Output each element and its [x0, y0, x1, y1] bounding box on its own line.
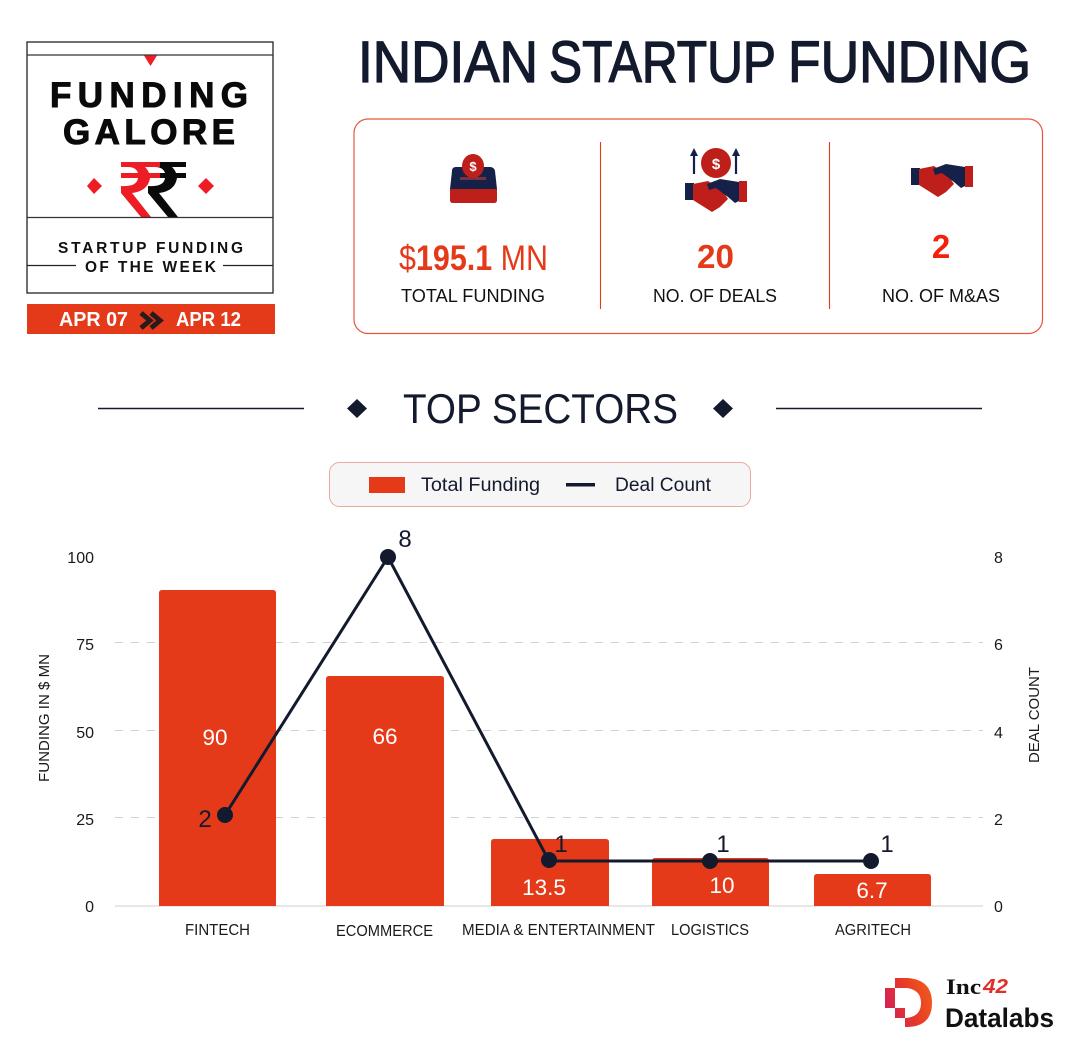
stat: number of deals: 20 [697, 238, 734, 275]
left axis title: FUNDING IN $ MN [37, 654, 53, 782]
right axis labels: 8 [994, 550, 1003, 567]
date banner: APR 12 [176, 309, 241, 331]
badge heading: FUNDING [50, 76, 248, 115]
icon: coin into box [450, 154, 497, 203]
category labels: ECOMMERCE [336, 923, 433, 940]
logo: Inc42 Datalabs: Datalabs [945, 1003, 1054, 1033]
panel: funding galore badge [27, 42, 273, 293]
right axis title: DEAL COUNT [1027, 667, 1043, 763]
deal count labels: 2 [198, 806, 212, 833]
bar value labels: 66 [372, 724, 398, 749]
category labels [185, 922, 911, 940]
deal count labels: 1 [716, 831, 730, 858]
stat: number of M&As: NO. OF M&AS [882, 286, 1000, 306]
bars [159, 590, 931, 906]
stat: number of deals: NO. OF DEALS [653, 286, 777, 306]
legend: Deal Count [615, 475, 712, 496]
legend [330, 462, 750, 506]
date banner [27, 304, 275, 334]
right axis labels: 0 [994, 899, 1003, 916]
badge subheading: OF THE WEEK [85, 259, 217, 276]
icon: handshake [911, 164, 973, 197]
panel: key statistics [354, 119, 1042, 334]
left axis labels: 0 [85, 899, 94, 916]
icon: coin into box: $ [469, 159, 477, 174]
left axis labels [67, 550, 94, 916]
bar value labels: 10 [709, 873, 735, 898]
title: STARTUP [549, 30, 776, 95]
bar value labels: 90 [202, 725, 228, 750]
logo: Inc42 Datalabs: Inc [946, 974, 981, 999]
category labels: FINTECH [185, 922, 250, 939]
deal count labels: 1 [880, 831, 894, 858]
stat: number of M&As [882, 228, 1000, 306]
icon: handshake with coin and arrows: $ [712, 156, 721, 173]
badge heading [50, 76, 248, 152]
stat: number of M&As: 2 [932, 228, 950, 265]
date banner: APR 07 [59, 309, 128, 331]
stat: total funding [399, 239, 548, 306]
title [358, 30, 1031, 95]
stat: total funding: TOTAL FUNDING [401, 286, 545, 306]
stat: number of deals [653, 238, 777, 306]
right axis labels [994, 550, 1003, 916]
left axis labels: 25 [76, 812, 94, 829]
deal count labels: 8 [398, 526, 412, 553]
bar value labels: 6.7 [856, 878, 888, 903]
title: INDIAN [358, 30, 538, 95]
right axis labels: 2 [994, 812, 1003, 829]
icon: double rupee symbols [87, 162, 214, 217]
icon: handshake with coin and arrows [685, 148, 747, 212]
bar value labels: 13.5 [522, 875, 566, 900]
right axis labels: 4 [994, 725, 1003, 742]
left axis labels: 50 [76, 725, 94, 742]
title: FUNDING [788, 30, 1031, 95]
category labels: AGRITECH [835, 922, 911, 939]
badge subheading [58, 240, 243, 276]
icon: red triangle marker [144, 56, 157, 66]
deal count labels: 1 [554, 831, 568, 858]
badge heading: GALORE [63, 113, 235, 152]
icon: Datalabs D mark [885, 978, 932, 1027]
badge subheading: STARTUP FUNDING [58, 240, 243, 257]
stat: total funding: $195.1 MN [399, 239, 548, 278]
logo: Inc42 Datalabs: 42 [982, 976, 1008, 998]
deal count line [217, 549, 879, 869]
heading: top sectors: TOP SECTORS [403, 385, 678, 432]
right axis labels: 6 [994, 637, 1003, 654]
deal count labels [198, 526, 894, 858]
logo: Inc42 Datalabs [885, 974, 1054, 1033]
left axis labels: 75 [76, 637, 94, 654]
legend: Total Funding [421, 475, 540, 496]
icon: double chevron arrow [141, 313, 160, 328]
bar value labels [202, 724, 888, 903]
chart: top sectors funding and deal count [37, 526, 1043, 940]
heading: top sectors [98, 385, 982, 432]
left axis labels: 100 [67, 550, 94, 567]
category labels: LOGISTICS [671, 922, 749, 939]
category labels: MEDIA & ENTERTAINMENT [462, 922, 655, 939]
